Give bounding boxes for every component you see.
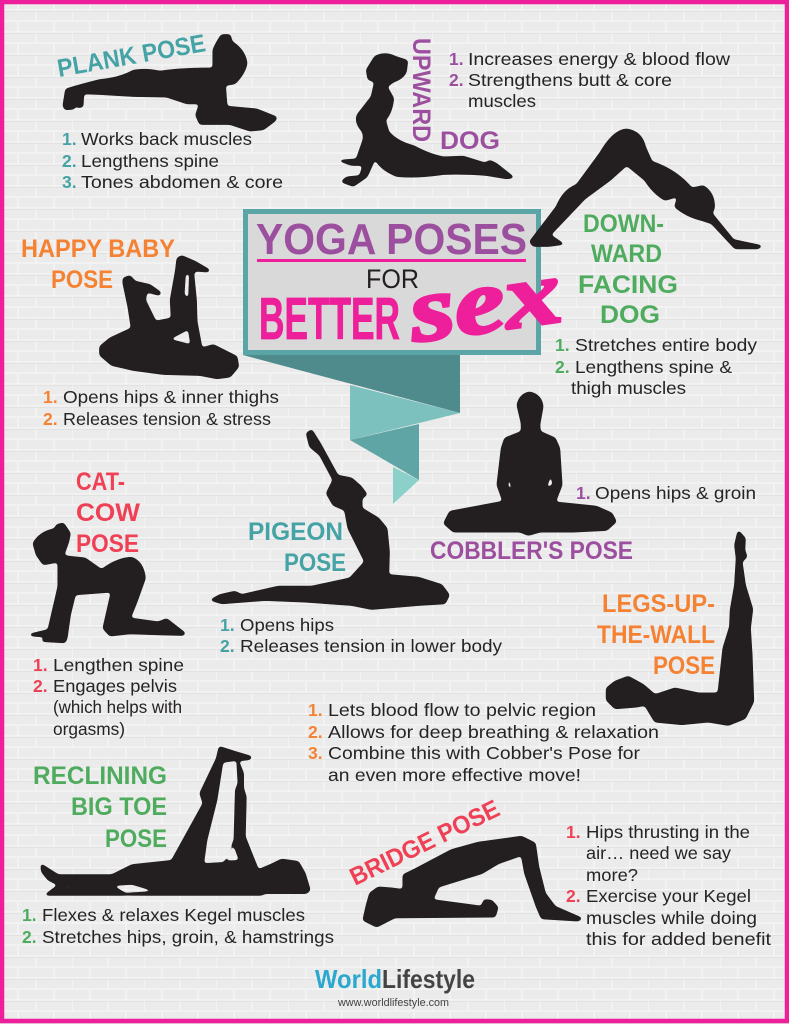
icon: downward dog silhouette [530,129,762,248]
list: pigeon benefits: Opens hips [240,615,334,635]
panel: happy baby pose [21,235,279,429]
list: bridge benefits: Hips thrusting in the [586,822,750,842]
heading: happy baby pose [21,235,175,294]
panel: downward facing dog [530,129,762,398]
heading: reclining big toe pose: POSE [105,825,167,853]
heading: downward facing dog: DOG [600,301,660,329]
list: plank benefits: 2. [62,151,77,171]
heading: cobbler's pose: COBBLER'S POSE [430,537,633,565]
list: pigeon benefits: Releases tension in lower body [240,636,502,656]
list: plank benefits: Lengthens spine [81,151,219,171]
list: cat-cow benefits: (which helps with [53,697,182,717]
list: cat-cow benefits: Engages pelvis [53,676,177,696]
list: cobbler benefits: 1. [576,483,591,503]
heading: cat-cow pose [76,468,140,558]
heading: reclining big toe pose: RECLINING [33,762,167,790]
list: cobbler benefits: Opens hips & groin [595,483,756,503]
heading: pigeon pose: PIGEON [248,518,343,546]
list: upward dog benefits [449,49,730,111]
heading: downward facing dog [578,210,678,329]
heading: legs-up-the-wall pose [597,590,715,680]
list: bridge benefits: this for added benefit [586,929,771,949]
icon: legs-up silhouette [607,531,753,725]
list: cat-cow benefits: 2. [33,676,48,696]
heading: upward dog: DOG [440,127,500,155]
list: plank benefits: 3. [62,172,77,192]
list: legs-up benefits: Combine this with Cobber's Pose for [328,743,640,763]
heading: pigeon pose [248,518,346,577]
heading: happy baby pose: HAPPY BABY [21,235,175,263]
list: legs-up benefits: an even more effective move! [328,765,581,785]
list: happy baby benefits: Opens hips & inner thighs [63,387,279,407]
icon: cat-cow silhouette [30,523,185,642]
list: downward dog benefits: Stretches entire body [575,335,757,355]
list: legs-up benefits: Allows for deep breathing & relaxation [328,722,659,742]
list: bridge benefits [566,822,771,949]
list: pigeon benefits [220,615,502,656]
logo: WorldLifestyle [315,964,475,1009]
list: cat-cow benefits [33,655,184,739]
list: legs-up benefits [308,700,659,785]
logo: WorldLifestyle: www.worldlifestyle.com [337,997,449,1009]
ribbon under title [243,355,460,504]
list: pigeon benefits: 1. [220,615,235,635]
list: reclining benefits: Flexes & relaxes Kegel muscles [42,905,305,925]
icon: bridge silhouette [363,837,582,927]
heading: pigeon pose: POSE [284,549,346,577]
list: plank benefits [62,129,283,192]
list: cat-cow benefits: 1. [33,655,48,675]
icon: reclining silhouette [41,747,310,895]
logo: WorldLifestyle: Lifestyle [382,964,475,994]
list: upward dog benefits: 1. [449,49,464,69]
panel: cat-cow pose [30,468,185,739]
title: for: FOR [366,264,419,294]
list: happy baby benefits: 1. [43,387,58,407]
list: plank benefits: Tones abdomen & core [81,172,283,192]
list: upward dog benefits: muscles [468,91,536,111]
list: reclining benefits [22,905,334,947]
list: happy baby benefits: 2. [43,409,58,429]
heading: reclining big toe pose [33,762,167,853]
list: happy baby benefits [43,387,279,429]
list: downward dog benefits: Lengthens spine & [575,357,732,377]
heading: downward facing dog: WARD [591,240,662,268]
list: cat-cow benefits: Lengthen spine [53,655,184,675]
list: legs-up benefits: 3. [308,743,323,763]
list: downward dog benefits: 1. [555,335,570,355]
logo: WorldLifestyle: World [315,964,382,994]
icon: plank silhouette [63,35,277,131]
heading: plank pose: PLANK POSE [55,29,208,83]
list: legs-up benefits: 2. [308,722,323,742]
list: downward dog benefits: thigh muscles [571,378,686,398]
list: plank benefits: 1. [62,129,77,149]
list: legs-up benefits: Lets blood flow to pelvic region [328,700,596,720]
list: upward dog benefits: 2. [449,70,464,90]
icon: upward dog silhouette [339,54,513,186]
list: bridge benefits: 1. [566,822,581,842]
list: bridge benefits: air… need we say [586,843,731,863]
list: downward dog benefits: 2. [555,357,570,377]
list: bridge benefits: 2. [566,886,581,906]
list: bridge benefits: muscles while doing [586,908,757,928]
list: pigeon benefits: 2. [220,636,235,656]
list: cat-cow benefits: orgasms) [53,719,125,739]
panel: reclining big toe pose [22,747,334,947]
panel: plank pose [55,29,283,192]
heading: legs-up-the-wall pose: LEGS-UP- [602,590,715,618]
title: yoga poses: YOGA POSES [256,215,527,264]
list: reclining benefits: 2. [22,927,37,947]
heading: legs-up-the-wall pose: THE-WALL [597,621,715,649]
icon: cobbler silhouette [444,392,616,535]
list: downward dog benefits [555,335,757,398]
icon: pigeon silhouette [211,430,449,609]
list: bridge benefits: Exercise your Kegel [586,886,751,906]
panel: title box [246,212,567,362]
list: reclining benefits: Stretches hips, groin, & hamstrings [42,927,334,947]
list: upward dog benefits: Increases energy & blood flow [468,49,730,69]
panel: legs-up-the-wall pose [308,531,753,785]
icon: happy baby silhouette [100,256,238,378]
heading: upward dog [407,38,500,155]
list: reclining benefits: 1. [22,905,37,925]
list: bridge benefits: more? [586,865,638,885]
list: happy baby benefits: Releases tension & stress [63,409,271,429]
title: better: BETTER [259,286,400,352]
heading: upward dog: UPWARD [407,38,435,142]
list: legs-up benefits: 1. [308,700,323,720]
title: sex script: sex [401,240,567,362]
heading: downward facing dog: DOWN- [583,210,664,238]
panel: upward dog [339,38,730,186]
heading: cat-cow pose: POSE [76,530,139,558]
heading: reclining big toe pose: BIG TOE [71,793,167,821]
heading: downward facing dog: FACING [578,271,678,299]
heading: cat-cow pose: CAT- [76,468,125,496]
heading: happy baby pose: POSE [51,266,113,294]
list: plank benefits: Works back muscles [81,129,252,149]
heading: legs-up-the-wall pose: POSE [653,652,715,680]
panel: pigeon pose [211,430,502,656]
heading: bridge pose: BRIDGE POSE [345,795,504,891]
panel: cobbler's pose [430,392,756,565]
panel: bridge pose [345,795,771,949]
heading: cat-cow pose: COW [76,499,140,527]
list: upward dog benefits: Strengthens butt & core [468,70,672,90]
